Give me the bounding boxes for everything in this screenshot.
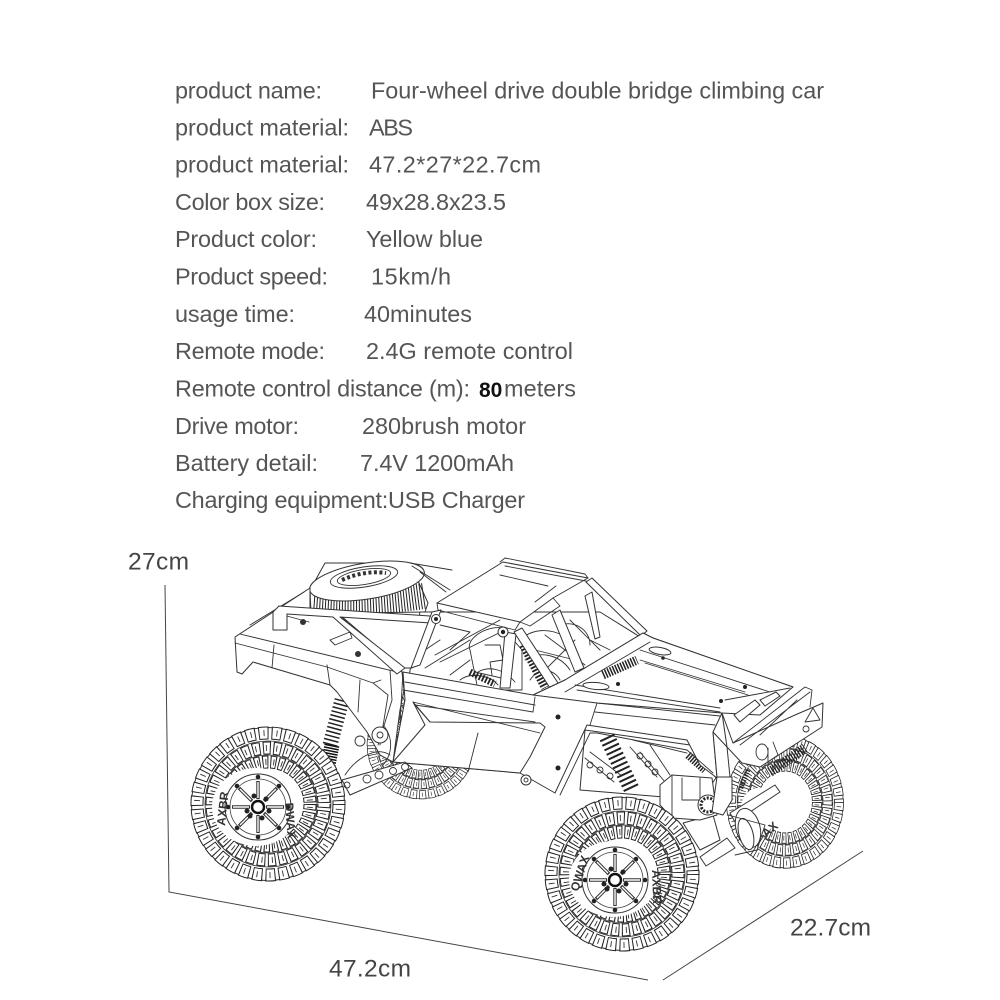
spec: color box size [175,189,506,215]
spec: charging equipment: Charging equipment:USB Charger [175,487,525,513]
spec: usage time: 40minutes [364,301,472,327]
spec: product size: product material: [175,152,349,178]
spec: color box size: Color box size: [175,189,325,215]
rear left hub [225,774,291,840]
roll bars [273,578,647,688]
rear axle and trailing link [342,736,412,795]
chassis seen through the front wheel well [580,730,716,800]
rear left tyre [191,727,345,881]
sidewall lettering: rear: AXBR [214,791,232,826]
spec: product speed: Product speed: [175,264,328,290]
spec: product name [175,78,824,104]
rear right tyre [367,691,475,799]
spec: usage time [175,301,472,327]
spec: product speed [175,264,451,290]
spec: battery detail: Battery detail: [175,450,318,476]
spec: remote control distance: meters [504,376,576,402]
hood [533,633,793,722]
roof [437,558,588,630]
spec: drive motor: 280brush motor [362,413,526,439]
front bumper and bull bar [722,687,823,790]
sidewall lettering: front: QWAX [568,854,592,893]
illustration: rock crawler car [191,554,844,951]
dimension label: length: 47.2cm [329,956,411,982]
spec: battery detail: 7.4V 1200mAh [360,450,514,476]
spec: product color: Product color: [175,226,317,252]
spec: drive motor [175,413,526,439]
spec: drive motor: Drive motor: [175,413,299,439]
specification list [175,78,824,513]
spec: remote control distance: Remote control distance (m): [175,376,470,402]
spec: product speed: 15km/h [371,264,451,290]
front right tyre [726,736,844,868]
spec: product material: ABS [369,114,413,140]
spec: remote mode: Remote mode: [175,338,325,364]
spec: remote mode [175,338,573,364]
front suspension spring [607,737,632,790]
front pillar and fender corner [713,732,730,777]
spare wheel [307,554,452,636]
spec: product color [175,226,483,252]
spec: usage time: usage time: [175,301,295,327]
dimension label: width: 22.7cm [790,914,871,942]
rear bed and body [235,588,430,765]
spec: product size: 47.2*27*22.7cm [369,152,541,178]
spec: battery detail [175,450,514,476]
spec: product name: product name: [175,78,322,104]
spec: remote control distance: 80 [479,379,502,402]
sidewall lettering: rear [214,791,298,839]
main body side panel [393,633,793,795]
spec: color box size: 49x28.8x23.5 [366,189,506,215]
spec: product color: Yellow blue [366,226,483,252]
spec: remote mode: 2.4G remote control [366,338,573,364]
dimension lines [165,585,863,980]
front right tyre: AX [759,819,781,840]
sidewall lettering: front: AXBR [649,870,664,904]
rear suspension spring [328,700,342,765]
front axle and motor [660,775,780,866]
front left tyre [545,797,699,951]
spec: product material: product material: [175,114,349,140]
front left hub [582,847,648,913]
sidewall lettering: front [568,854,664,904]
cockpit interior [405,612,645,700]
spec: product name: Four-wheel drive double bridge climbing car [371,78,824,104]
spec: product size [175,152,541,178]
sidewall lettering: rear: DWAX [282,802,298,839]
dimension label: height: 27cm [128,548,189,576]
